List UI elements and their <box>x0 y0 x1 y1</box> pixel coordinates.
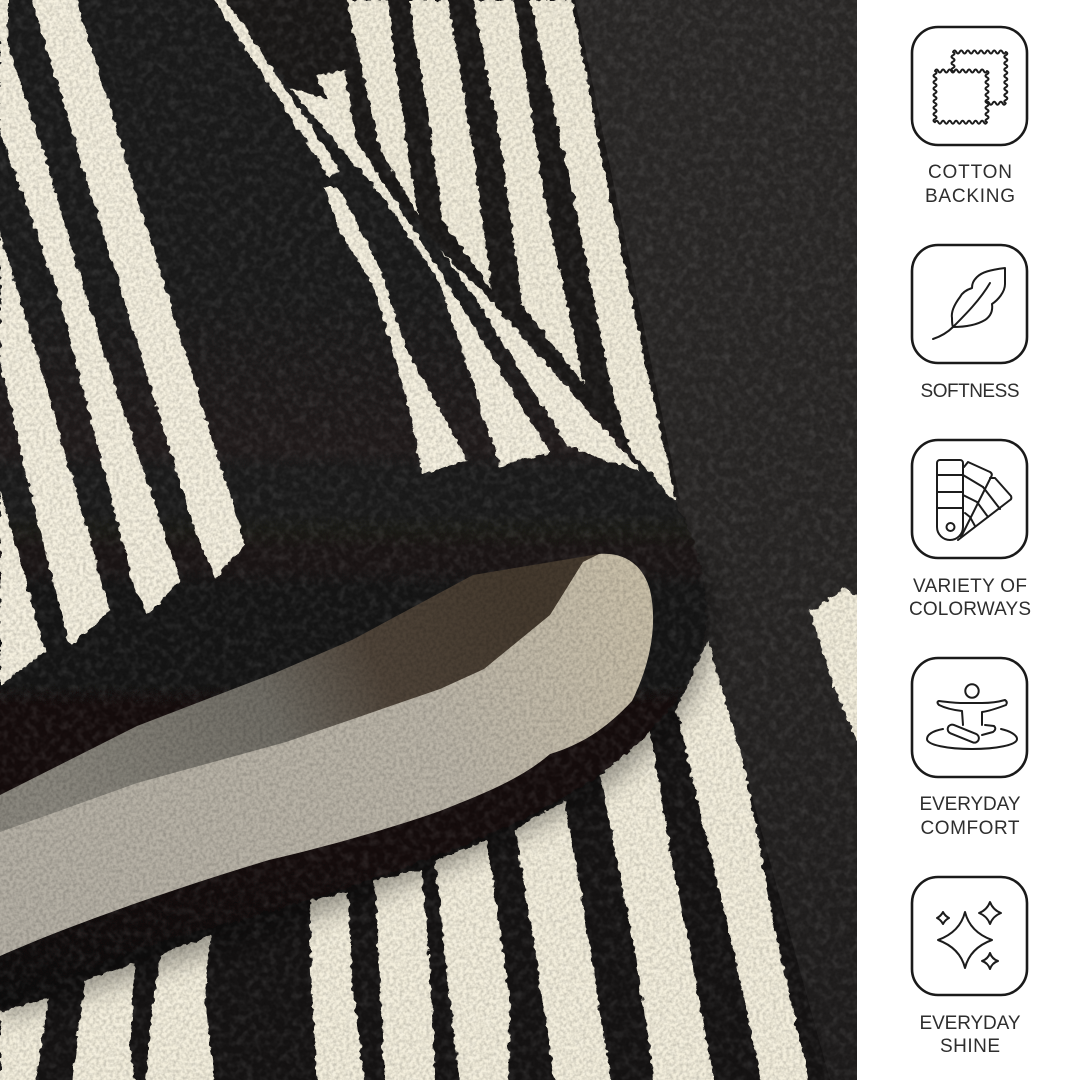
label: everyday shine: SHINE <box>940 1036 1000 1057</box>
feature: cotton backing <box>912 27 1027 207</box>
icon frame <box>912 245 1027 363</box>
shadow under the fold <box>0 540 716 1020</box>
yarn lump highlights <box>0 0 857 1080</box>
folded rug body <box>0 0 706 1012</box>
rug floor background <box>0 0 857 1080</box>
icon: meditating figure <box>927 684 1017 749</box>
icon: colour fan deck <box>937 460 1011 540</box>
rug photo panel <box>0 0 857 1080</box>
stripes behind the fold <box>316 0 676 500</box>
icon frame <box>912 877 1027 995</box>
icon: sparkles <box>937 902 1001 969</box>
textile grain overlay <box>0 0 857 1080</box>
icon: feather <box>933 268 1005 339</box>
label: everyday comfort: COMFORT <box>920 818 1020 839</box>
label: everyday shine: EVERYDAY <box>920 1013 1021 1034</box>
label: softness: SOFTNESS <box>920 381 1020 402</box>
stripes on the folded rug <box>0 0 640 685</box>
cotton backing front face <box>0 554 653 956</box>
icon: fabric swatches <box>934 50 1007 124</box>
feature: variety of colorways <box>909 440 1031 620</box>
dark striped ground at bottom <box>0 680 830 1080</box>
cotton backing inner rear face <box>0 554 650 870</box>
stripes on the floor below the fold <box>0 588 862 1080</box>
label: cotton backing: BACKING <box>925 186 1015 207</box>
label: everyday comfort: EVERYDAY <box>920 794 1021 815</box>
dark striped ground at top <box>200 0 680 500</box>
label: variety of colorways: VARIETY OF <box>913 576 1027 597</box>
icon frame <box>912 27 1027 145</box>
feature: everyday comfort <box>912 658 1027 839</box>
feature: everyday shine <box>912 877 1027 1057</box>
icon frame <box>912 658 1027 777</box>
label: cotton backing: COTTON <box>928 162 1012 183</box>
icon frame <box>912 440 1027 558</box>
feature: softness <box>912 245 1027 402</box>
label: variety of colorways: COLORWAYS <box>909 599 1031 620</box>
